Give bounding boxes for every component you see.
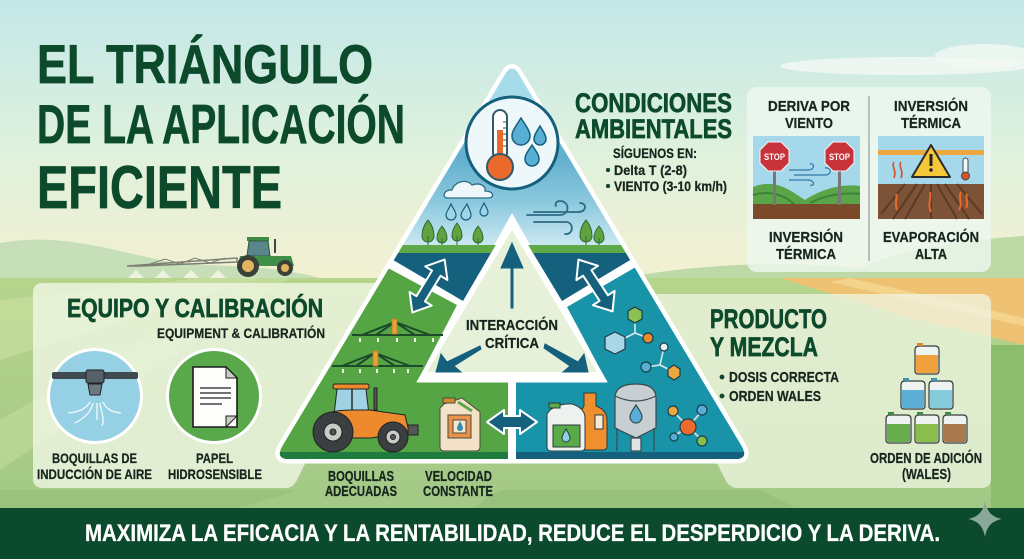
heading: equipo: EQUIPO Y CALIBRACIÓN (67, 293, 323, 323)
label: inversion termica bottom (769, 228, 843, 263)
arrow: up (501, 243, 523, 308)
label: inversion termica top: INVERSIÓN (894, 97, 968, 115)
panel: equipo y calibracion (33, 283, 395, 488)
icon: mixing tank (615, 384, 656, 451)
label: boquillas adecuadas: BOQUILLAS (328, 468, 394, 485)
icon: product containers (547, 393, 607, 451)
illustration: stop signs and wind (753, 136, 860, 219)
triangle apex and circle (466, 97, 558, 189)
main title: EL TRIÁNGULO (37, 33, 373, 95)
list: producto bullets: DOSIS CORRECTA (729, 369, 839, 386)
icon: trees right (580, 220, 604, 245)
icon: air induction nozzle (47, 348, 143, 444)
inner triangle: critical interaction (417, 218, 607, 382)
label: interaccion critica: INTERACCIÓN (466, 316, 558, 334)
heading: condiciones ambientales (575, 88, 732, 144)
label: orden de adicion (870, 449, 982, 483)
icon: molecule hexagons (605, 307, 680, 380)
list: environmental parameters: Delta T (2-8) (614, 162, 687, 178)
label: deriva por viento (768, 98, 850, 132)
label: orden de adicion: (WALES) (902, 466, 951, 483)
arrow: down left (436, 346, 481, 372)
label: papel hidrosensible: HIDROSENSIBLE (168, 466, 262, 482)
icon: water sensitive paper (166, 348, 262, 444)
list: producto bullets (720, 369, 839, 405)
icon: wales order jug pyramid (886, 343, 967, 443)
heading: producto (710, 304, 827, 362)
heading: producto: PRODUCTO (710, 304, 827, 334)
arrow: top to product (568, 252, 623, 319)
label: velocidad constante: VELOCIDAD (425, 468, 492, 485)
label: evaporacion alta: EVAPORACIÓN (883, 228, 979, 246)
icon: trees left (422, 220, 483, 245)
label: inversion termica bottom: TÉRMICA (776, 246, 836, 263)
icon: field sprayer tractor (127, 237, 294, 278)
heading: condiciones ambientales: AMBIENTALES (575, 114, 732, 144)
label: inversion termica top: TÉRMICA (901, 115, 961, 132)
icon: thermometer (487, 110, 513, 180)
label: papel hidrosensible (168, 450, 262, 482)
icon: cloud and rain (444, 181, 493, 220)
arrow: down right (544, 344, 588, 372)
label: boquillas adecuadas: ADECUADAS (325, 483, 397, 500)
heading: producto: Y MEZCLA (710, 332, 818, 362)
panel: producto y mezcla (630, 294, 991, 488)
list: producto bullets: ORDEN WALES (729, 388, 821, 405)
label: deriva por viento: DERIVA POR (768, 98, 850, 115)
label: boquillas de induccion: INDUCCIÓN DE AIRE (37, 465, 152, 482)
label: evaporacion alta (883, 228, 979, 263)
label: velocidad constante: CONSTANTE (423, 483, 493, 500)
icon: sprayer boom lower (332, 351, 423, 373)
label: evaporacion alta: ALTA (915, 246, 947, 263)
illustration: stop signs and wind: STOP (829, 152, 850, 162)
arrow: top to equipment (401, 253, 456, 319)
arrow: equipment to product (487, 410, 537, 434)
illustration: stop signs and wind: STOP (764, 152, 785, 162)
label: deriva por viento: VIENTO (785, 115, 833, 132)
main title (37, 33, 405, 221)
label: boquillas adecuadas (325, 468, 397, 500)
list: environmental parameters (606, 145, 727, 194)
label: boquillas de induccion: BOQUILLAS DE (52, 450, 137, 466)
main title: DE LA APLICACIÓN (37, 93, 405, 155)
label: inversion termica top (894, 97, 968, 132)
list: environmental parameters: SÍGUENOS EN: (613, 145, 697, 161)
subtitle: equipment: EQUIPMENT & CALIBRATIÓN (157, 324, 325, 341)
label: orden de adicion: ORDEN DE ADICIÓN (870, 449, 982, 467)
icon: orange tractor (313, 384, 418, 452)
icon: sprayer boom upper (352, 319, 443, 342)
triangle section: product (516, 268, 744, 459)
label: interaccion critica: CRÍTICA (485, 335, 539, 352)
icon: molecule round (668, 405, 707, 446)
icon: water drops (512, 118, 546, 166)
label: velocidad constante (423, 468, 493, 500)
icon: wind (527, 201, 585, 234)
triangle section: equipment (280, 268, 508, 459)
icon: sparkle (968, 501, 1002, 537)
triangle diagram (275, 64, 749, 464)
label: inversion termica bottom: INVERSIÓN (769, 228, 843, 246)
footer banner (0, 501, 1024, 559)
icon: beige canister (440, 398, 480, 451)
list: environmental parameters: VIENTO (3-10 km/h) (614, 178, 727, 194)
illustration: thermal inversion warning (878, 136, 984, 219)
panel: deriva e inversion (747, 87, 991, 272)
label: boquillas de induccion (37, 450, 152, 482)
triangle section: environment (394, 68, 630, 301)
label: interaccion critica (466, 316, 558, 352)
heading: condiciones ambientales: CONDICIONES (575, 88, 732, 118)
label: papel hidrosensible: PAPEL (196, 450, 233, 466)
main title: EFICIENTE (37, 154, 282, 221)
